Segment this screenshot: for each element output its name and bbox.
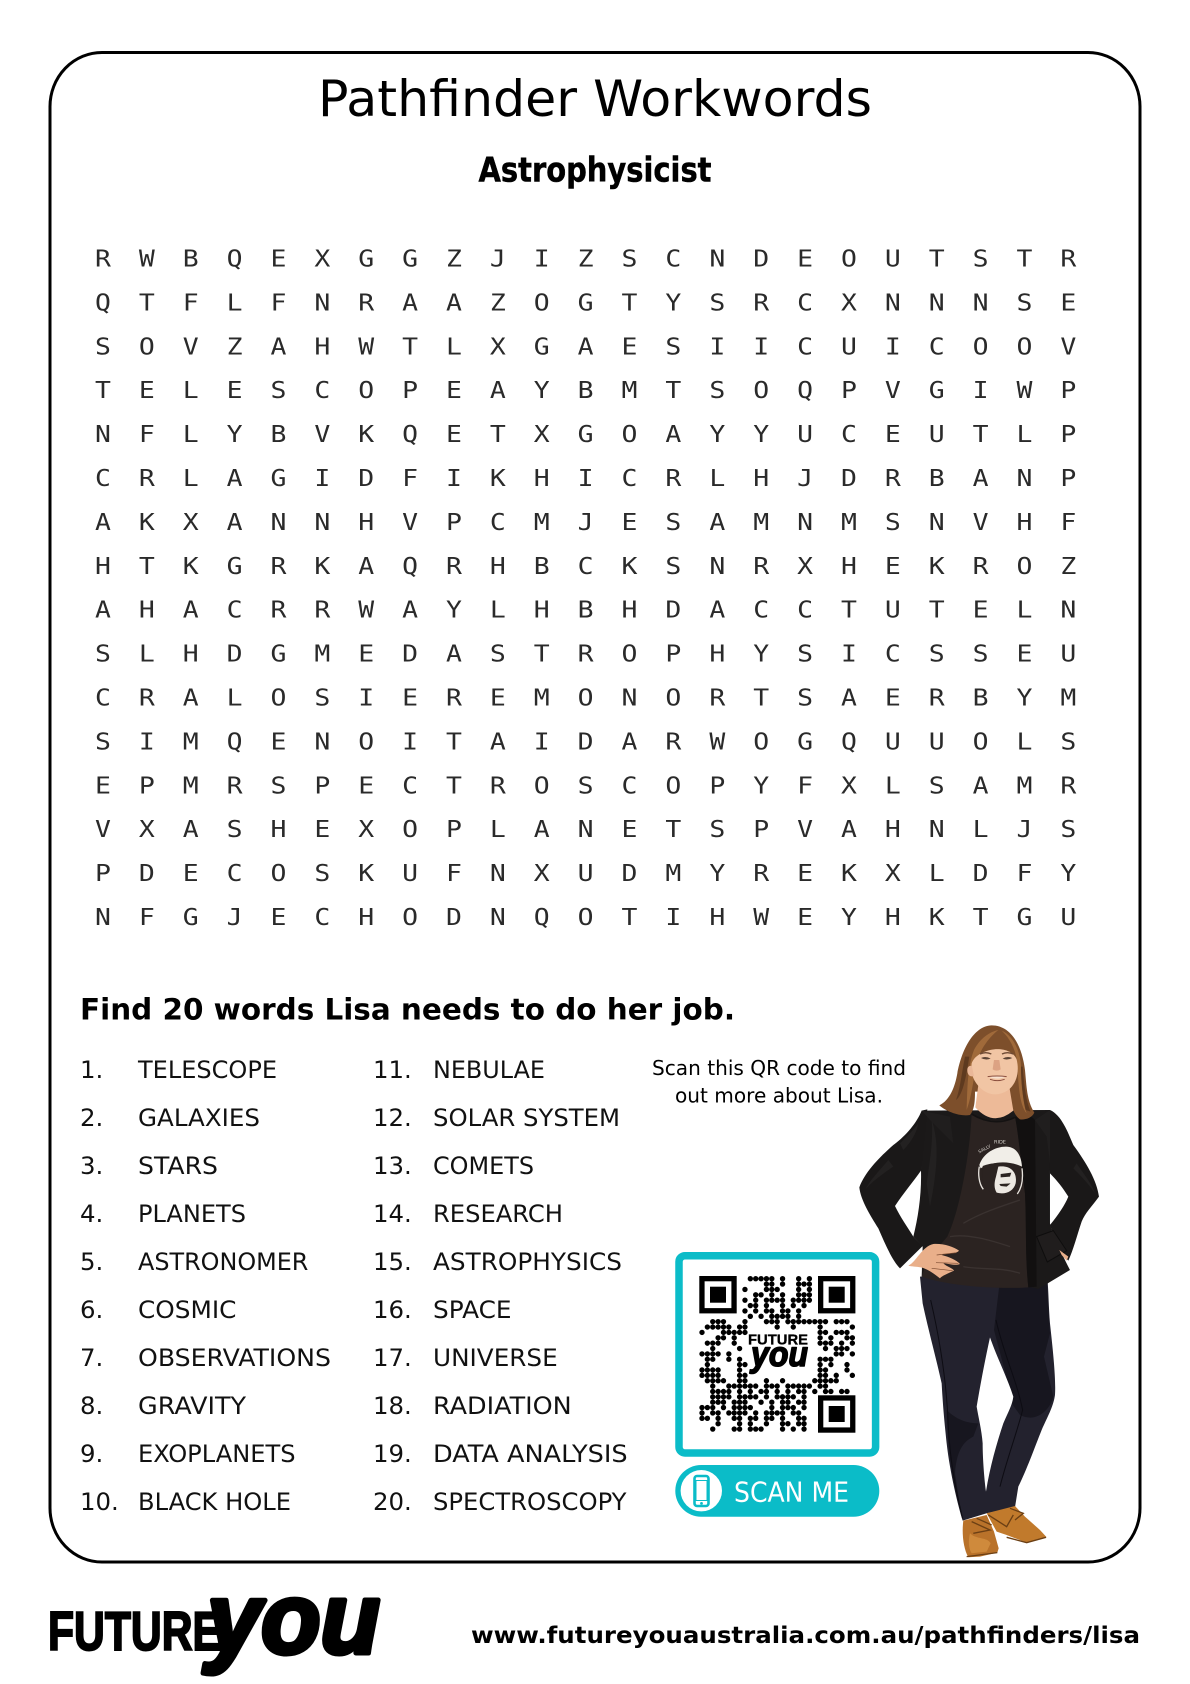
word list: column 1: 6.	[80, 1295, 103, 1324]
jacket pocket	[1037, 1231, 1067, 1262]
word list: column 1	[80, 1055, 331, 1516]
word list: column 2: 18.	[373, 1391, 412, 1420]
word list: column 2: RADIATION	[433, 1391, 572, 1420]
word list: column 2: 11.	[373, 1055, 412, 1084]
t-shirt print: Sally Ride helmet	[977, 1140, 1022, 1196]
word list: column 1: 2.	[80, 1103, 103, 1132]
logo: Future You: you	[202, 1563, 380, 1675]
heading: find 20 words: Find 20 words Lisa needs to do her job.	[80, 992, 735, 1026]
logo: Future You: FUTURE	[48, 1600, 221, 1662]
word list: column 2: 20.	[373, 1487, 412, 1516]
word list: column 1: 5.	[80, 1247, 103, 1276]
word search letter grid: NFGJECHODNQOTIHWEYHKTGU	[95, 904, 1104, 931]
word list: column 1: 4.	[80, 1199, 103, 1228]
word list: column 2	[373, 1055, 628, 1516]
word search letter grid	[95, 245, 1104, 931]
word list: column 2: DATA ANALYSIS	[433, 1439, 628, 1468]
word list: column 2: ASTROPHYSICS	[433, 1247, 622, 1276]
word list: column 2: 14.	[373, 1199, 412, 1228]
word list: column 2: SOLAR SYSTEM	[433, 1103, 620, 1132]
illustration: Lisa standing	[859, 1025, 1099, 1557]
word search letter grid: CRALOSIEREMONORTSAERBYM	[95, 684, 1104, 711]
word search letter grid: QTFLFNRAAZOGTYSRCXNNNSE	[95, 289, 1104, 316]
shoes	[963, 1506, 1047, 1557]
hand on hip	[908, 1244, 960, 1278]
word list: column 2: 13.	[373, 1151, 412, 1180]
lapels	[1015, 1116, 1037, 1287]
word list: column 1: GRAVITY	[138, 1391, 246, 1420]
word list: column 1: TELESCOPE	[137, 1055, 277, 1084]
QR code card: you	[749, 1335, 808, 1374]
word search letter grid: EPMRSPECTROSCOPYFXLSAMR	[95, 772, 1104, 799]
word list: column 2: 12.	[373, 1103, 412, 1132]
t-shirt print: Sally Ride helmet: SALLY	[977, 1143, 992, 1155]
subtitle: Astrophysicist: Astrophysicist	[478, 150, 712, 190]
word list: column 2: 16.	[373, 1295, 412, 1324]
blazer	[859, 1109, 1099, 1289]
icon: phone	[694, 1476, 708, 1506]
title: Pathfinder Workwords	[318, 70, 872, 128]
word list: column 1: 9.	[80, 1439, 103, 1468]
word search letter grid: RWBQEXGGZJIZSCNDEOUTSTR	[95, 245, 1104, 272]
website URL: www.futureyouaustralia.com.au/pathfinders/lisa	[471, 1621, 1140, 1649]
word search letter grid: HTKGRKAQRHBCKSNRXHEKROZ	[95, 552, 1104, 579]
logo: Future You	[48, 1563, 380, 1675]
scan instruction text: Scan this QR code to find	[652, 1056, 906, 1080]
word search letter grid: AHACRRWAYLHBHDACCTUTELN	[95, 596, 1104, 623]
word search letter grid: SLHDGMEDASTROPHYSICSSEU	[95, 640, 1104, 667]
QR code card	[679, 1256, 876, 1453]
word list: column 1: COSMIC	[138, 1295, 236, 1324]
word search letter grid: TELESCOPEAYBMTSOQPVGIWP	[95, 377, 1104, 404]
word list: column 1: 10.	[80, 1487, 119, 1516]
word list: column 1: GALAXIES	[138, 1103, 260, 1132]
t-shirt print: Sally Ride helmet: RIDE	[994, 1140, 1006, 1146]
word search letter grid: VXASHEXOPLANETSPVAHNLJS	[95, 816, 1104, 843]
word list: column 1: EXOPLANETS	[138, 1439, 296, 1468]
word search letter grid: SOVZAHWTLXGAESIICUICOOV	[95, 333, 1104, 360]
word search letter grid: AKXANNHVPCMJESAMNMSNVHF	[95, 509, 1104, 535]
word search letter grid: CRLAGIDFIKHICRLHJDRBANP	[95, 465, 1104, 492]
QR code card: FUTURE	[748, 1332, 808, 1348]
word search letter grid: SIMQENOITAIDARWOGQUUOLS	[95, 728, 1104, 755]
word list: column 2: RESEARCH	[433, 1199, 563, 1228]
word list: column 2: SPECTROSCOPY	[433, 1487, 627, 1516]
word list: column 2: NEBULAE	[433, 1055, 545, 1084]
word list: column 2: 17.	[373, 1343, 412, 1372]
word list: column 1: BLACK HOLE	[138, 1487, 291, 1516]
word search letter grid: NFLYBVKQETXGOAYYUCEUTLP	[95, 421, 1104, 448]
word list: column 2: UNIVERSE	[433, 1343, 558, 1372]
word list: column 1: 7.	[80, 1343, 103, 1372]
shirt with collar	[922, 1113, 1028, 1288]
head with hair and face	[939, 1025, 1034, 1119]
word list: column 1: 8.	[80, 1391, 103, 1420]
word list: column 2: COMETS	[433, 1151, 534, 1180]
scan instruction text: out more about Lisa.	[675, 1083, 883, 1107]
scan me button	[675, 1465, 879, 1517]
word search letter grid: PDECOSKUFNXUDMYREKXLDFY	[95, 860, 1104, 887]
scan me button: SCAN ME	[734, 1478, 849, 1509]
word list: column 2: 15.	[373, 1247, 412, 1276]
word list: column 1: OBSERVATIONS	[138, 1343, 331, 1372]
word list: column 1: ASTRONOMER	[138, 1247, 308, 1276]
word list: column 1: STARS	[138, 1151, 218, 1180]
word list: column 2: 19.	[373, 1439, 412, 1468]
trousers	[920, 1277, 1055, 1521]
word list: column 1: PLANETS	[138, 1199, 246, 1228]
word list: column 1: 1.	[80, 1055, 103, 1084]
word list: column 1: 3.	[80, 1151, 103, 1180]
word list: column 2: SPACE	[433, 1295, 512, 1324]
scan instruction text	[652, 1056, 906, 1107]
